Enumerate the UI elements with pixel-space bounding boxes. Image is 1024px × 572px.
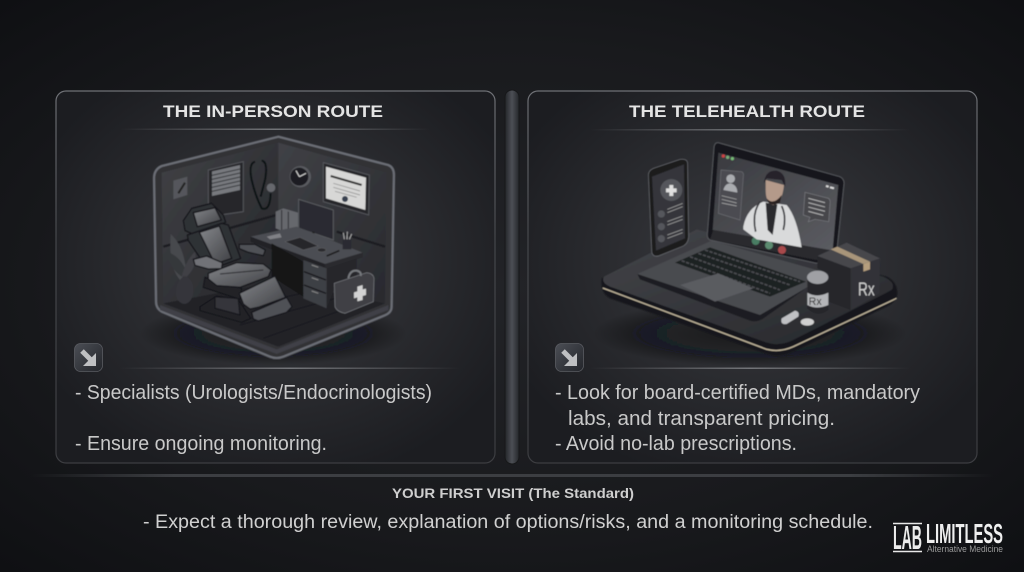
central divider xyxy=(505,90,519,464)
text block: in-person bullets xyxy=(75,382,432,455)
doctor xyxy=(743,202,802,247)
pen cup xyxy=(343,239,351,249)
logo: Limitless xyxy=(893,518,1003,556)
heading: telehealth route: THE TELEHEALTH ROUTE xyxy=(629,102,865,121)
heading: in-person route: THE IN-PERSON ROUTE xyxy=(163,102,383,121)
books xyxy=(276,208,298,234)
monitor xyxy=(299,199,333,240)
panel: in-person route xyxy=(56,91,495,463)
chat bubble xyxy=(803,192,830,222)
call bar xyxy=(710,230,833,262)
stethoscope xyxy=(251,161,271,209)
medical bag xyxy=(334,273,374,313)
pills xyxy=(781,311,799,324)
plant xyxy=(170,234,187,280)
window blind xyxy=(208,162,243,217)
text block: telehealth bullets xyxy=(555,382,920,455)
footer: first visit: YOUR FIRST VISIT (The Standard) xyxy=(392,486,634,501)
wall sign xyxy=(173,177,187,199)
profile card xyxy=(718,170,743,220)
text block: telehealth bullets: - Avoid no-lab prescriptions. xyxy=(555,433,797,455)
laptop screen xyxy=(707,143,844,263)
diploma xyxy=(323,163,369,215)
logo: Limitless: Alternative Medicine xyxy=(927,544,1003,555)
arrow badge xyxy=(74,344,102,372)
footer: first visit: - Expect a thorough review, explanation of options/risks, and a monitoring schedule. xyxy=(143,512,873,533)
logo: Limitless: LAB xyxy=(893,519,922,556)
clock xyxy=(290,166,311,187)
rx bottle xyxy=(807,280,828,314)
rx box xyxy=(817,243,880,268)
text block: telehealth bullets: - Look for board-certified MDs, mandatory xyxy=(555,382,920,404)
text block: telehealth bullets: labs, and transparent pricing. xyxy=(568,408,835,430)
text block: in-person bullets: - Specialists (Urologists/Endocrinologists) xyxy=(75,382,432,404)
illustration: laptop video consult xyxy=(593,143,907,367)
panel: telehealth route xyxy=(528,91,977,463)
footer: first visit xyxy=(143,486,873,533)
laptop base xyxy=(637,241,817,321)
text block: in-person bullets: - Ensure ongoing monitoring. xyxy=(75,433,327,455)
illustration: laptop video consult: Rx xyxy=(809,296,822,308)
chair xyxy=(183,203,292,322)
arrow badge xyxy=(556,344,584,372)
platform xyxy=(601,230,897,356)
illustration: clinic room xyxy=(140,137,407,365)
desk xyxy=(251,227,363,264)
illustration: laptop video consult: Rx xyxy=(858,278,875,299)
phone xyxy=(648,159,689,256)
